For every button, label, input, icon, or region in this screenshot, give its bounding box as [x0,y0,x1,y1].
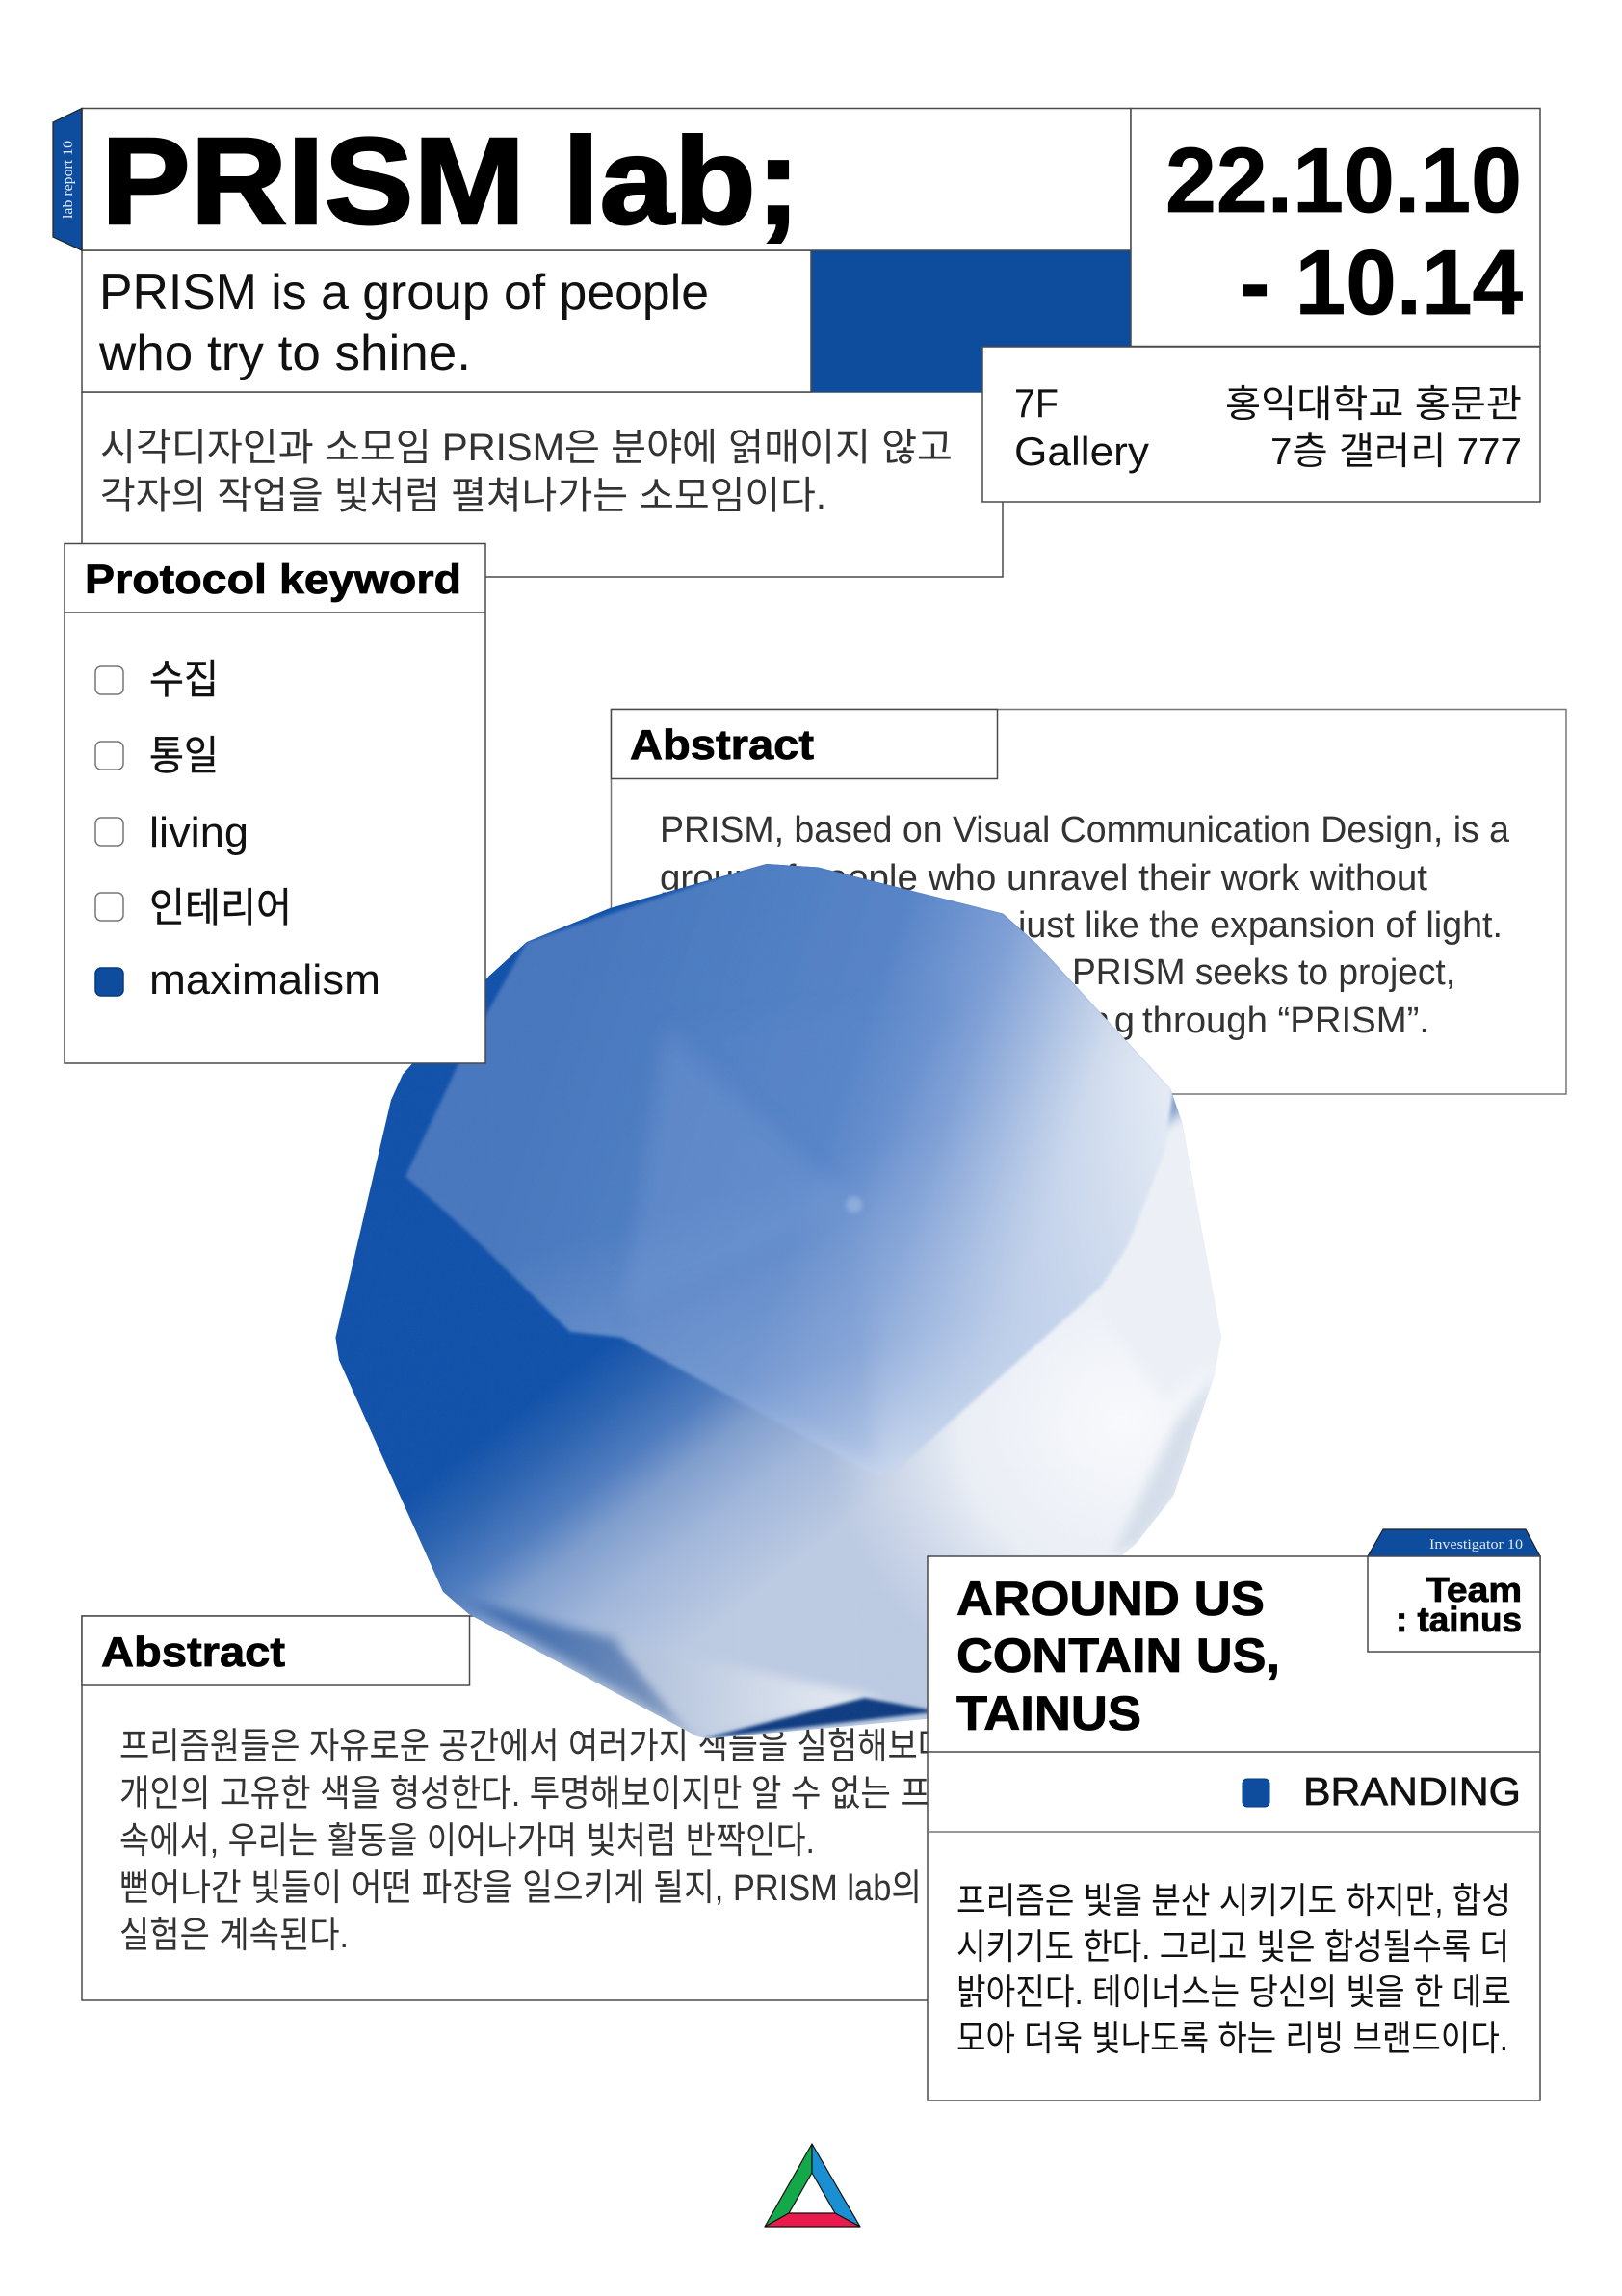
checklist item: 통일 [95,733,219,778]
text block: abstract english: PRISM, based on Visual Communication Design, is a [660,810,1510,850]
panel: location: 7F [1014,380,1059,426]
panel: team: : tainus [1396,1600,1522,1639]
upper dome [405,864,1174,1462]
panel: tainus branding [928,1529,1540,2100]
dome inner ridges [632,1038,824,1289]
panel: location: 홍익대학교 홍문관 [1225,384,1522,426]
checklist item: living [95,809,249,856]
tab: investigator 10 [1368,1529,1540,1556]
panel: korean description: 시각디자인과 소모임 PRISM은 분야에 얽매이지 않고 [100,427,953,469]
panel: location: 7층 갤러리 777 [1270,431,1522,473]
text block: branding description: 프리즘은 빛을 분산 시키기도 하지만, 합성 [956,1881,1511,1920]
panel: header [53,108,1540,577]
icon: prism triangle logo [765,2144,860,2227]
text block: abstract english [660,810,1510,1041]
panel: date: - 10.14 [1240,231,1523,334]
heading: abstract english: Abstract [630,721,814,769]
heading: title [82,108,1131,250]
panel: date: 22.10.10 [1165,129,1522,232]
panel: abstract english [611,709,1566,1094]
panel: protocol keyword [65,543,485,1063]
text block: abstract english: through “PRISM”. [1142,1001,1429,1041]
panel: date [1131,108,1540,347]
text block: branding description: 모아 더욱 빛나도록 하는 리빙 브랜드이다. [956,2019,1508,2058]
grain [337,867,920,1734]
panel: tagline: who try to shine. [98,326,471,381]
text block: abstract korean: 프리즘원들은 자유로운 공간에서 여러가지 색들을 실험해보며 [119,1727,948,1767]
heading: around us contain us, tainus: CONTAIN US, [956,1629,1280,1683]
panel: team: Team [1426,1570,1522,1609]
text block: abstract korean: 뻗어나간 빛들이 어떤 파장을 일으키게 될지, PRISM lab의 [119,1868,922,1909]
panel: abstract korean [82,1616,1045,2000]
heading: abstract korean: Abstract [101,1629,285,1676]
panel: team [1368,1556,1540,1652]
panel: tagline [82,250,811,392]
heading: around us contain us, tainus: AROUND US [956,1572,1265,1626]
heading: abstract english [611,709,998,778]
checklist item: 수집: 수집 [149,657,219,702]
text block: abstract korean: 개인의 고유한 색을 형성한다. 투명해보이지만 알 수 없는 프리즘 [119,1774,991,1814]
tab: lab report 10 [53,108,82,250]
text block: branding description: 밝아진다. 테이너스는 당신의 빛을 한 데로 [956,1972,1511,2012]
checklist item: maximalism: maximalism [149,956,380,1004]
heading: protocol keyword: Protocol keyword [85,557,461,603]
image: frosted blue polyhedron [335,864,1221,1739]
checklist item: 수집 [95,657,219,702]
text block: abstract english: group of people who unravel their work without [660,858,1427,899]
panel: tagline: PRISM is a group of people [99,265,709,321]
tab: lab report 10: lab report 10 [61,141,76,219]
text block: abstract english: just like the expansion of light. [1017,905,1503,946]
panel: location: Gallery [1014,429,1149,474]
checklist item: living: living [149,809,249,856]
text block: abstract english: PRISM seeks to project, [1072,952,1455,993]
panel: blue colour block [811,250,1131,392]
heading: around us contain us, tainus [956,1572,1280,1740]
tag: branding: BRANDING [1303,1769,1521,1813]
upper right white facet [1126,1108,1210,1277]
text block: abstract korean [119,1727,991,1956]
text block: branding description: 시키기도 한다. 그리고 빛은 합성될수록 더 [956,1927,1509,1967]
checklist item: 통일: 통일 [149,733,219,778]
panel: korean description [82,392,1003,577]
heading: title: PRISM lab; [101,113,800,250]
text block: abstract english: the light spreading [751,1001,1135,1041]
tag: branding [928,1752,1540,1832]
text block: branding description [956,1881,1511,2058]
heading: abstract korean [82,1616,470,1685]
panel: location [982,347,1540,502]
dark tip facet [703,1698,939,1738]
text block: abstract korean: 속에서, 우리는 활동을 이어나가며 빛처럼 반짝인다. [119,1821,815,1862]
tab: investigator 10: Investigator 10 [1429,1537,1523,1552]
lower right edge facet [1116,1387,1210,1552]
text block: abstract korean: 실험은 계속된다. [119,1916,349,1956]
checklist item: 인테리어: 인테리어 [149,885,292,930]
panel: korean description: 각자의 작업을 빛처럼 펼쳐나가는 소모임이다. [100,475,826,517]
bottom-left facets [458,1598,697,1736]
heading: around us contain us, tainus: TAINUS [956,1686,1141,1740]
